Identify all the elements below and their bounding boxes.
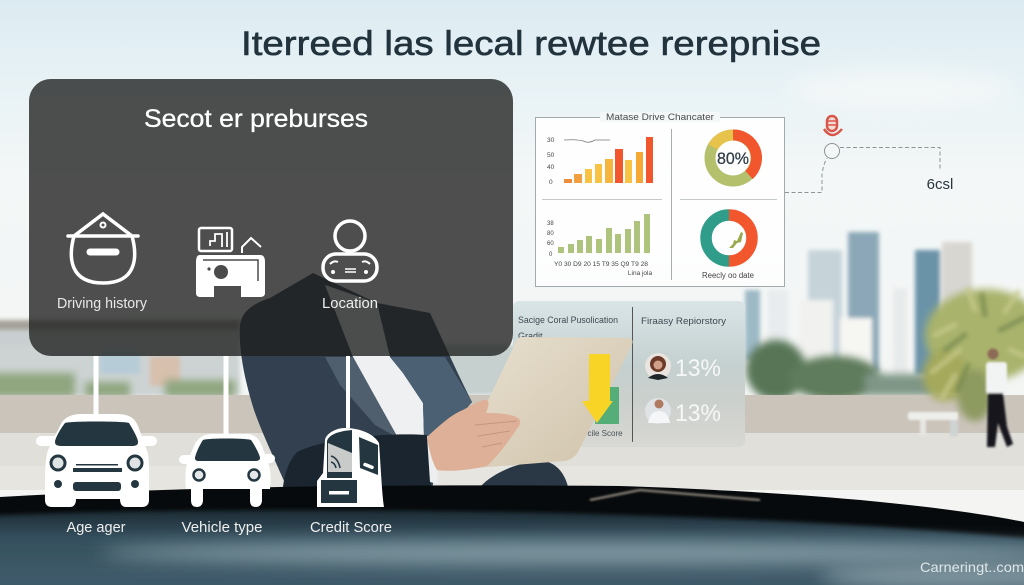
percent row 2: 13% [675, 400, 721, 427]
donut chart: ready date [702, 215, 755, 280]
palm tree [923, 289, 1024, 421]
bar chart: green: 0 [549, 252, 553, 258]
icon: credit score device [317, 428, 384, 507]
hand [427, 400, 520, 471]
right jacket side [390, 357, 472, 436]
label: location: Location [322, 296, 378, 312]
bar chart: green: Lina jola [628, 270, 652, 277]
icon: small car [179, 434, 275, 507]
icon: location person car [323, 221, 377, 281]
dashboard foreground [0, 485, 1024, 585]
bar chart: green: 60 [547, 241, 554, 247]
label: credit score: Credit Score [310, 520, 392, 536]
bar chart: orange [547, 137, 653, 186]
bar chart: green: Y0 30 D9 20 15 T9 35 Q9 T9 28 [554, 261, 648, 268]
left distant road and city [0, 320, 520, 396]
bar chart: green: 38 [547, 221, 554, 227]
shirt [325, 285, 424, 438]
label: vehicle type: Vehicle type [182, 520, 262, 536]
label: driving history: Driving history [57, 296, 148, 312]
icon: large car [36, 414, 157, 507]
percent row 2 [645, 398, 721, 427]
cuff [427, 436, 438, 484]
label: 6csl: 6csl [927, 176, 953, 193]
microphone icon and connector [785, 116, 940, 192]
percent row 1 [645, 353, 721, 382]
skyline buildings [745, 232, 972, 378]
icon: monitor and machine [196, 228, 265, 297]
lap [480, 461, 568, 487]
chart on tablet: arrow and green bars [582, 354, 623, 438]
tablet [427, 337, 633, 471]
panel: coral publication and repository: Gradit [518, 331, 543, 341]
dashboard teal surface [0, 510, 1024, 585]
donut chart: ready date: Reecly oo date [702, 271, 755, 280]
bar chart: orange: 50 [547, 152, 555, 159]
businesswoman [240, 273, 568, 490]
walking person [986, 348, 1013, 447]
jacket body [240, 273, 472, 490]
windshield reflection [590, 490, 760, 500]
donut chart: 80% [710, 135, 757, 181]
left lapel [325, 357, 398, 438]
connector lines [96, 356, 348, 436]
chart heading: Matase Drive Chancater [606, 112, 714, 122]
percent row 1: 13% [675, 355, 721, 382]
panel: coral publication and repository: Firaasy Repiorstory [641, 316, 726, 327]
bar chart: orange: 40 [547, 164, 555, 171]
panel: coral publication and repository [513, 301, 745, 447]
panel: coral publication and repository: Sacige Coral Pusolication [518, 315, 618, 326]
chart on tablet: arrow and green bars: cile Score [587, 429, 623, 438]
watermark: Carneringt..com [920, 559, 1024, 575]
dashboard black rim [0, 485, 1024, 585]
bar chart: green: 80 [547, 231, 554, 237]
bar chart: green [547, 214, 652, 277]
lower sleeve [283, 434, 431, 487]
bar chart: orange: 0 [549, 179, 553, 186]
icon: driving history [68, 214, 138, 283]
panel heading: Secot er preburses [144, 105, 368, 133]
dashboard highlight [100, 541, 1024, 565]
title: Iterreed las lecal rewtee rerepnise [241, 25, 821, 63]
donut chart: 80%: 80% [717, 149, 749, 168]
trees [746, 340, 935, 400]
wall and pavement [0, 395, 1024, 433]
dark panel: secot er preburses [29, 79, 513, 356]
label: age ager: Age ager [66, 520, 126, 536]
left greenery [0, 373, 235, 397]
panel: drive character charts [536, 112, 784, 286]
bench [908, 412, 958, 436]
bar chart: orange: 30 [547, 137, 555, 144]
